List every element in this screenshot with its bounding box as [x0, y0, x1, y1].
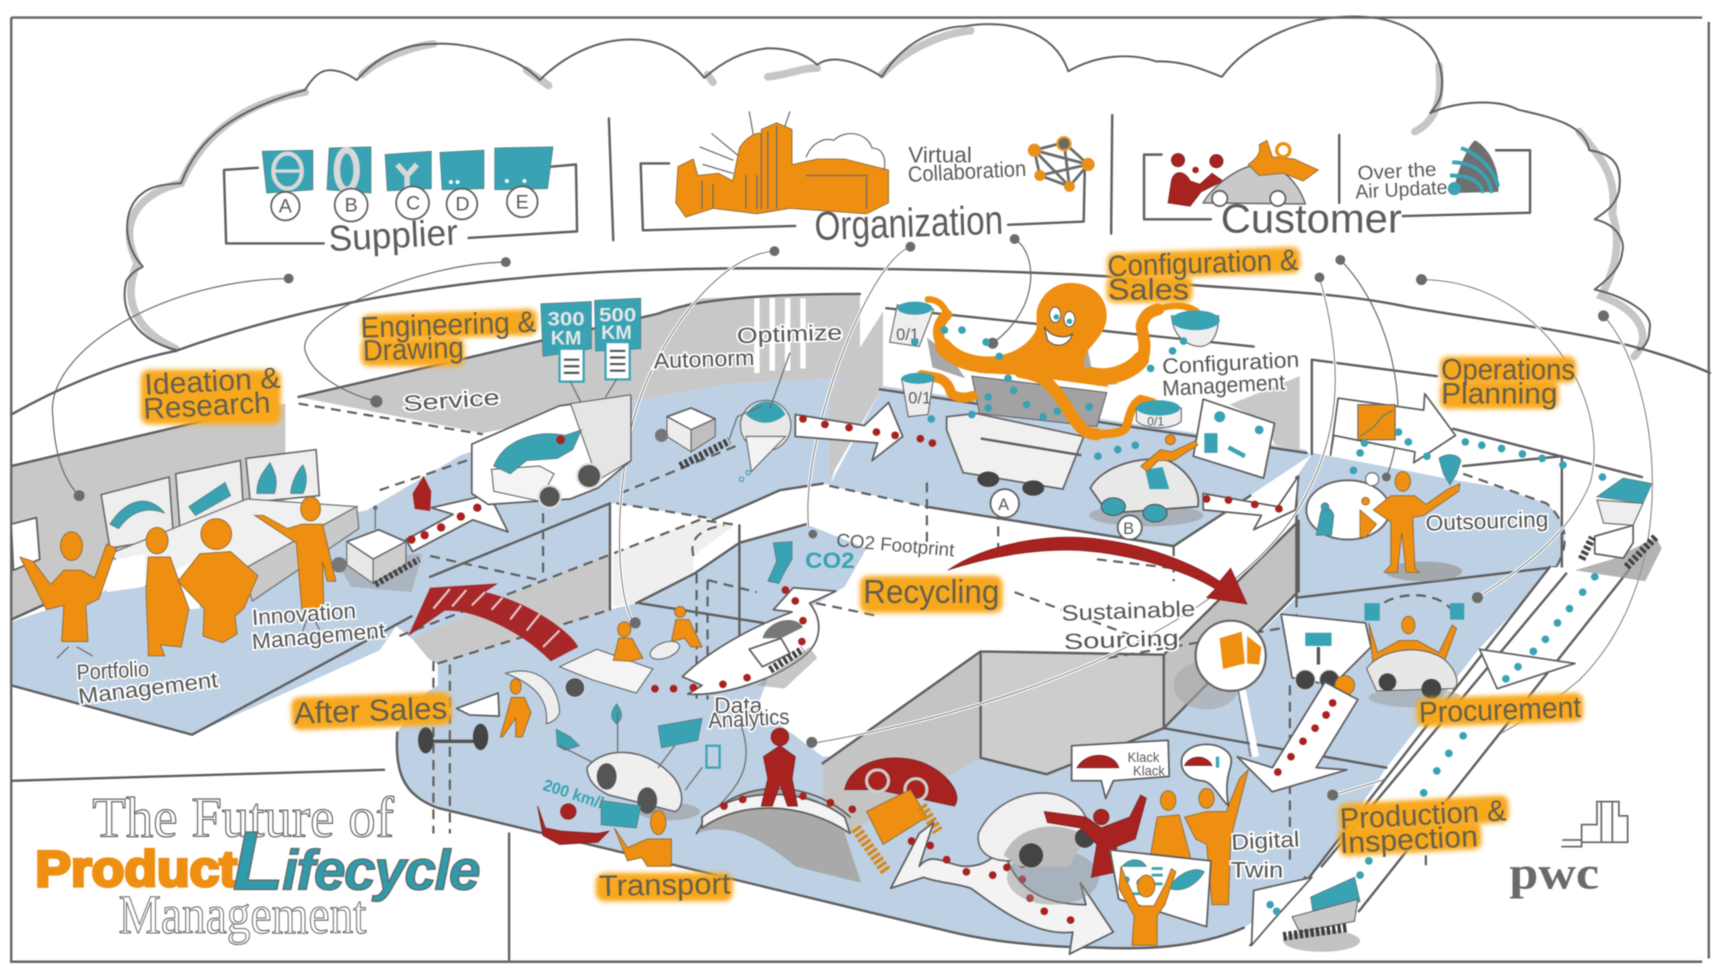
supplier letter badges: D — [455, 194, 470, 216]
label: digital twin: Twin — [1231, 857, 1283, 882]
digital twin whiteboard — [1110, 850, 1211, 927]
highlight label: ideation and research: Research — [143, 386, 271, 426]
floor: octopus room — [829, 386, 1311, 546]
highlight label: configuration and sales: Sales — [1108, 273, 1189, 306]
icon: network — [1028, 137, 1095, 192]
supplier panel — [224, 147, 577, 259]
label: digital twin: Digital — [1231, 826, 1300, 855]
arch bridge — [697, 788, 861, 883]
leader lines — [52, 234, 1652, 801]
title: the future of product lifecycle management: Management — [119, 884, 367, 945]
highlight label: after sales: After Sales — [293, 690, 448, 731]
red hatched arch arrow — [408, 583, 578, 661]
teal data dots — [911, 326, 1606, 915]
person: red presenter — [1044, 795, 1146, 877]
label: sustainable sourcing — [1061, 596, 1196, 654]
configured car with rider: B — [1123, 520, 1134, 538]
title: the future of product lifecycle management: Lifecycle — [233, 814, 481, 907]
octopus mascot — [921, 283, 1197, 434]
configured car with rider: A — [998, 496, 1009, 514]
horizon line — [11, 268, 1710, 415]
wall: central block faces — [823, 521, 1299, 847]
title: the future of product lifecycle management — [35, 787, 481, 945]
panel divider — [609, 115, 1112, 240]
wall: configuration back — [1230, 376, 1300, 451]
over the air update text: Over the — [1357, 159, 1437, 185]
icon: orange person on car — [1248, 140, 1318, 181]
highlight label: operations planning — [1440, 353, 1576, 411]
customer panel — [1144, 135, 1530, 241]
configured car with rider — [990, 435, 1203, 540]
icon: grey car — [1203, 164, 1305, 206]
virtual collaboration text: Collaboration — [907, 156, 1027, 187]
arrow: engineering to configuration — [795, 402, 936, 461]
label: optimize: Optimize — [736, 320, 843, 348]
arrow tail at road end — [1251, 877, 1312, 945]
arrow: recycling loop with robot — [651, 586, 836, 694]
data cups: 0/1 — [1147, 414, 1164, 428]
operations arrow with chart — [1330, 394, 1455, 463]
highlight label: production and inspection: Inspection — [1339, 820, 1479, 860]
footprint and CO2: CO2 Footprint — [836, 529, 956, 561]
configuration cart — [947, 376, 1107, 496]
highlight label: configuration and sales — [1107, 244, 1301, 306]
label: data analytics — [708, 693, 790, 733]
organization label: Organization — [814, 197, 1004, 249]
road — [1250, 567, 1629, 945]
magnifier — [1174, 621, 1266, 757]
highlight label: production and inspection: Production & — [1339, 794, 1507, 836]
data cups: 0/1 — [908, 390, 931, 408]
virtual collaboration text: Virtual — [908, 142, 972, 167]
label: service: Service — [402, 385, 500, 416]
highlight label: engineering and drawing: Drawing — [362, 331, 464, 368]
counter — [107, 499, 359, 610]
label: sustainable sourcing: Sourcing — [1063, 625, 1179, 654]
highlight label: ideation and research: Ideation & — [144, 362, 281, 402]
arrow: configuration to operations — [1203, 476, 1299, 530]
arrow: S curve through digital twin — [891, 822, 1113, 954]
sign cards: 300 km and 500 km: KM — [551, 327, 581, 349]
robot: autonomous box — [655, 408, 730, 466]
arrow head on road — [1480, 649, 1575, 689]
sign cards: 300 km and 500 km: KM — [601, 322, 632, 344]
two orange colleagues — [1150, 770, 1248, 905]
organization panel — [641, 112, 1095, 249]
person: portfolio manager — [20, 532, 116, 658]
procurement station: truck, person, car — [1281, 595, 1464, 707]
floor: left room and upper corridor — [11, 377, 860, 735]
speed label and presenters: 200 km/h — [541, 776, 611, 814]
robot: delivery at road top — [1575, 478, 1662, 581]
person: outsourcing lead — [1373, 455, 1462, 581]
label: sustainable sourcing: Sustainable — [1061, 596, 1196, 626]
supplier part cards — [262, 147, 553, 193]
group: ideation monitors — [11, 450, 319, 570]
sign cards: 300 km and 500 km: 300 — [547, 309, 585, 331]
floor: operations zone — [1296, 453, 1565, 598]
virtual collaboration text — [907, 142, 1027, 187]
icon: customer group — [1168, 154, 1223, 206]
label: digital twin — [1231, 826, 1300, 882]
icon: wifi signal — [1448, 140, 1499, 195]
speech bubble: klack klack: Klack — [1133, 763, 1166, 779]
speech bubble: klack klack — [1072, 740, 1169, 798]
highlight label: configuration and sales: Configuration & — [1107, 244, 1299, 283]
supplier letter badges — [271, 186, 538, 222]
title: the future of product lifecycle management: Product — [35, 840, 237, 897]
floor edges — [11, 477, 1556, 948]
pwc logo: pwc — [1509, 847, 1599, 898]
robot: tracked box — [331, 506, 422, 592]
data cups — [890, 302, 1220, 428]
supplier letter badges: B — [345, 195, 358, 217]
outsourcing lens — [1306, 473, 1390, 540]
label: portfolio management: Management — [77, 667, 219, 709]
wall: front partition — [413, 555, 610, 665]
label: innovation management: Innovation — [251, 598, 357, 630]
highlight label: recycling: Recycling — [863, 573, 999, 610]
robot: production tracked vehicle — [1283, 877, 1360, 952]
over the air update text: Air Update — [1355, 177, 1448, 203]
recycling arrow in red — [948, 537, 1247, 604]
person: innovation manager — [255, 497, 336, 634]
customer label: Customer — [1221, 195, 1402, 241]
speech bubble: klack klack: Klack — [1128, 750, 1160, 766]
wall: octopus room side — [829, 311, 883, 479]
data cups: 0/1 — [896, 326, 919, 344]
sign cards: 300 km and 500 km — [541, 298, 641, 404]
upper room lines — [11, 294, 1642, 567]
wall: white block behind partition — [613, 520, 733, 606]
footprint and CO2 — [768, 529, 956, 583]
configuration board — [1193, 399, 1275, 478]
highlight label: engineering and drawing: Engineering & — [360, 306, 537, 345]
label: configuration management: Configuration — [1162, 347, 1300, 379]
over the air update text — [1355, 159, 1448, 203]
dashed structure lines — [299, 404, 1565, 866]
person: team member — [146, 527, 189, 656]
supplier label: Supplier — [328, 211, 459, 259]
wall: ideation room — [11, 404, 285, 620]
engineering truck — [472, 395, 631, 508]
icon: optimize funnel — [730, 353, 791, 481]
digital twin car — [978, 793, 1099, 905]
title: the future of product lifecycle management: The Future of — [92, 787, 394, 850]
arrow: procurement to production — [1237, 682, 1358, 792]
footprint and CO2: CO2 — [805, 548, 855, 573]
highlight label: operations planning: Planning — [1441, 378, 1557, 411]
label: portfolio management: Portfolio — [76, 656, 150, 685]
label: configuration management — [1162, 347, 1300, 401]
sign cards: 300 km and 500 km: 500 — [599, 304, 636, 326]
wall: engineering back wall — [299, 294, 860, 433]
label: autonorm: Autonorm — [653, 345, 755, 373]
highlight label: ideation and research — [141, 362, 281, 426]
orange robot with red car — [845, 758, 957, 872]
decorative stripes on back wall — [757, 298, 803, 373]
highlight label: production and inspection — [1338, 794, 1509, 860]
speech bubble: car plus part — [1181, 744, 1231, 806]
icon: factory — [676, 112, 889, 217]
label: data analytics: Analytics — [708, 704, 790, 733]
highlight label: engineering and drawing — [360, 306, 537, 368]
label: innovation management — [251, 598, 386, 654]
label: data analytics: Data — [714, 693, 763, 718]
cloud outline — [125, 16, 1650, 356]
highlight label: procurement: Procurement — [1418, 691, 1582, 730]
supplier letter badges: C — [406, 192, 420, 214]
supplier letter badges: A — [279, 196, 293, 218]
label: configuration management: Management — [1162, 369, 1286, 401]
label: outsourcing: Outsourcing — [1425, 506, 1549, 536]
speed label and presenters — [538, 776, 671, 866]
arrow: ideation to engineering — [406, 476, 508, 552]
pwc logo — [1509, 802, 1628, 898]
supplier letter badges: E — [516, 191, 529, 213]
person: red transport lead — [761, 728, 797, 806]
floor: lower ring — [397, 524, 1556, 948]
highlight label: operations planning: Operations — [1441, 353, 1575, 386]
person: team member from behind — [178, 519, 258, 643]
data analytics car with sensors — [556, 704, 746, 820]
after sales repair scene — [418, 606, 702, 753]
highlight label: transport: Transport — [599, 868, 731, 903]
person: orange presenter at board — [1119, 866, 1176, 945]
label: innovation management: Management — [251, 618, 386, 654]
label: portfolio management — [76, 656, 219, 709]
